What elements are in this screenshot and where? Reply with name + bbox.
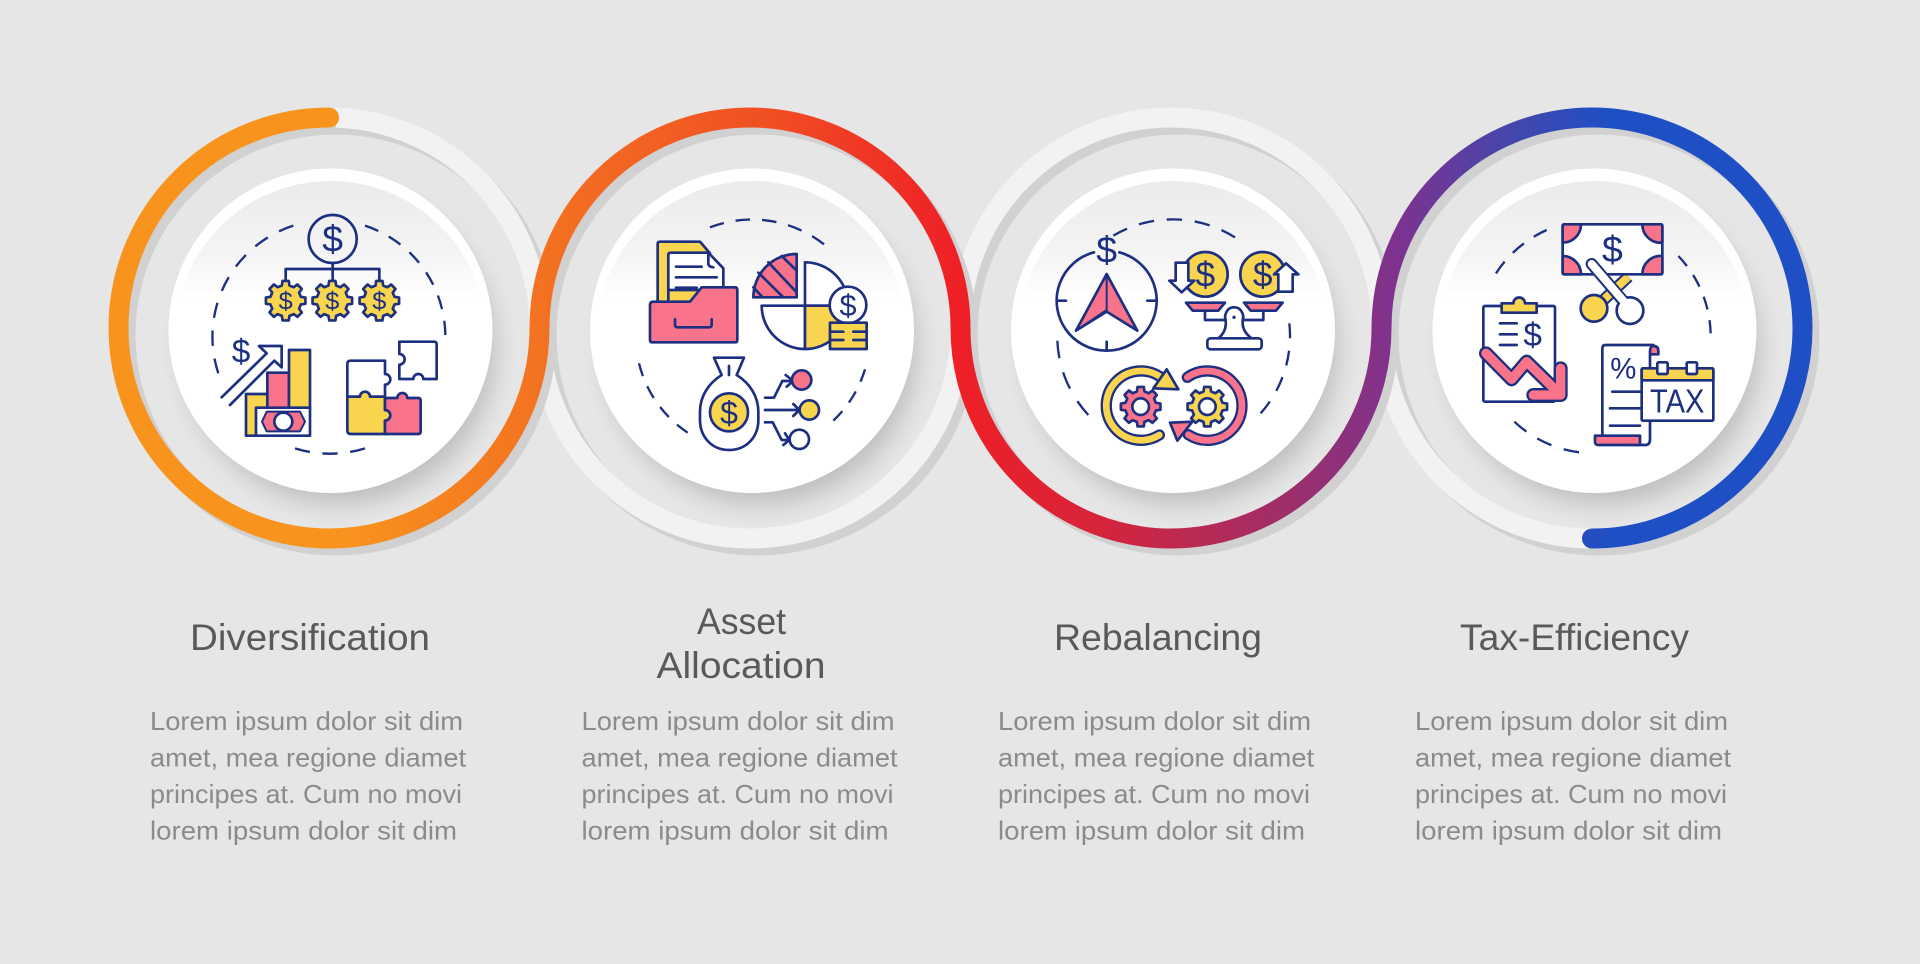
body text: rebalancing: principes at. Cum no movi (998, 779, 1310, 809)
body text: asset allocation (582, 706, 898, 846)
body text: tax-efficiency (1415, 706, 1732, 846)
body text: asset allocation: principes at. Cum no movi (582, 779, 894, 809)
icon: tax-efficiency: $ (1602, 228, 1623, 270)
icon: tax-efficiency (1483, 224, 1713, 452)
icon: rebalancing: $ (1253, 256, 1273, 295)
icon: tax-efficiency: TAX (1650, 384, 1704, 421)
icon: diversification: $ (232, 334, 250, 371)
gradient ribbon connecting the four steps (118, 118, 1810, 546)
body text: diversification: principes at. Cum no movi (150, 779, 462, 809)
disc 2 (590, 168, 917, 504)
panel: diversification (150, 168, 496, 846)
body text: asset allocation: Lorem ipsum dolor sit dim (582, 706, 894, 736)
panel: rebalancing (998, 168, 1338, 846)
icon: asset allocation: $ (839, 289, 857, 323)
icon: diversification (212, 215, 445, 454)
disc 4 (1432, 168, 1760, 504)
heading: Asset Allocation: Allocation (656, 645, 826, 686)
heading: Asset Allocation (656, 601, 826, 686)
heading: Asset Allocation: Asset (697, 601, 787, 642)
body text: rebalancing (998, 706, 1315, 846)
heading: Rebalancing: Rebalancing (1054, 617, 1262, 658)
body text: asset allocation: lorem ipsum dolor sit dim (582, 816, 888, 846)
disc 1 (168, 168, 496, 504)
panel: asset allocation (582, 168, 917, 846)
body text: rebalancing: amet, mea regione diamet (998, 742, 1315, 772)
icon: asset allocation: $ (720, 395, 738, 431)
light ribbon track (329, 118, 1599, 546)
body text: rebalancing: lorem ipsum dolor sit dim (998, 816, 1305, 846)
icon: asset allocation (639, 219, 867, 450)
icon: tax-efficiency: $ (1523, 317, 1542, 354)
icon: rebalancing: $ (1096, 229, 1117, 271)
body text: diversification: lorem ipsum dolor sit dim (150, 816, 457, 846)
body text: diversification: amet, mea regione diamet (150, 742, 467, 772)
body text: rebalancing: Lorem ipsum dolor sit dim (998, 706, 1311, 736)
icon: rebalancing (1057, 219, 1298, 441)
icon: diversification: $ (279, 288, 293, 316)
icon: diversification: $ (372, 288, 386, 316)
icon: diversification: $ (325, 288, 339, 316)
body text: tax-efficiency: amet, mea regione diamet (1415, 742, 1732, 772)
panel: tax-efficiency (1415, 168, 1760, 846)
icon: rebalancing: $ (1196, 256, 1216, 295)
body text: asset allocation: amet, mea regione diamet (582, 742, 898, 772)
body text: diversification: Lorem ipsum dolor sit dim (150, 706, 463, 736)
heading: Diversification: Diversification (190, 617, 430, 658)
icon: tax-efficiency: % (1610, 353, 1636, 386)
body text: diversification (150, 706, 467, 846)
disc 3 (1011, 168, 1338, 504)
body text: tax-efficiency: principes at. Cum no movi (1415, 779, 1727, 809)
icon: diversification: $ (322, 217, 343, 259)
heading: Tax-Efficiency: Tax-Efficiency (1460, 617, 1689, 658)
body text: tax-efficiency: lorem ipsum dolor sit dim (1415, 816, 1722, 846)
body text: tax-efficiency: Lorem ipsum dolor sit dim (1415, 706, 1728, 736)
